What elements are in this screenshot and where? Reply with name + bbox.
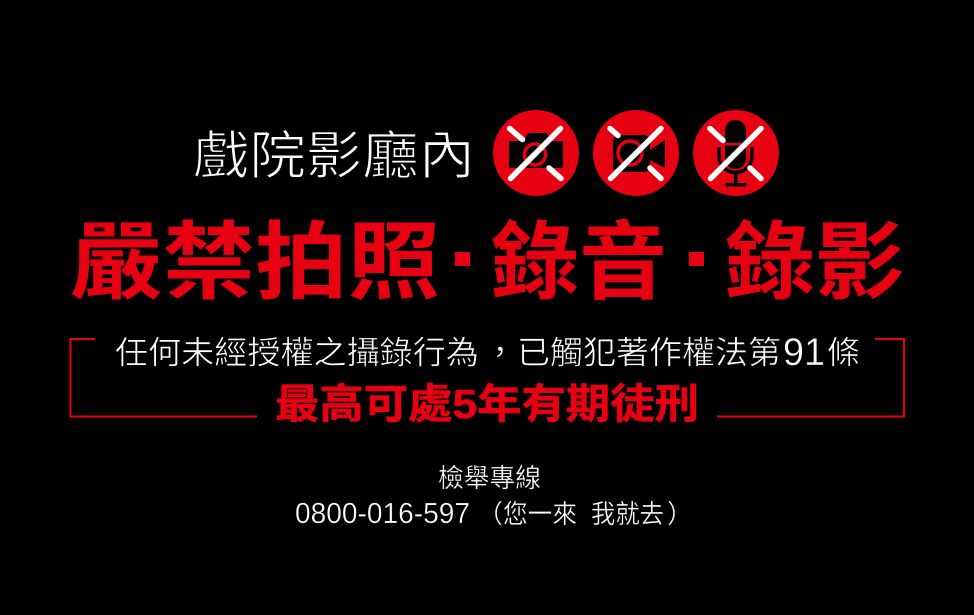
- legal warning text: ，: [484, 334, 516, 370]
- hotline number: 0800-016-597: [295, 498, 470, 530]
- main headline: photo and recording strictly prohibited: 嚴禁拍照: [70, 216, 440, 311]
- callout frame right: [717, 339, 904, 416]
- legal warning text: 任何未經授權之攝錄行為: [115, 334, 479, 370]
- hotline number: 我就去: [591, 499, 664, 529]
- legal warning text: [115, 331, 860, 374]
- callout frame left: [70, 339, 257, 416]
- legal warning text: 91: [783, 331, 825, 374]
- heading: inside the theatre: 戲院影廳內: [193, 128, 475, 186]
- penalty text: 最高可處5年有期徒刑: [275, 381, 699, 427]
- icon: no audio recording: [693, 110, 779, 196]
- legal warning text: 條: [827, 334, 860, 370]
- hotline label: 檢舉專線: [438, 463, 541, 493]
- icon: no photography: [493, 110, 579, 196]
- main headline: photo and recording strictly prohibited: 錄影: [725, 216, 905, 311]
- hotline number: ）: [667, 499, 693, 529]
- legal warning text: 已觸犯著作權法第: [517, 334, 781, 370]
- hotline number: （: [477, 499, 503, 529]
- hotline number: 您一來: [503, 499, 577, 529]
- main headline: photo and recording strictly prohibited: 錄音: [491, 216, 667, 311]
- hotline number: [295, 498, 693, 530]
- icon: no video recording: [593, 110, 679, 196]
- main headline: photo and recording strictly prohibited: [70, 216, 905, 311]
